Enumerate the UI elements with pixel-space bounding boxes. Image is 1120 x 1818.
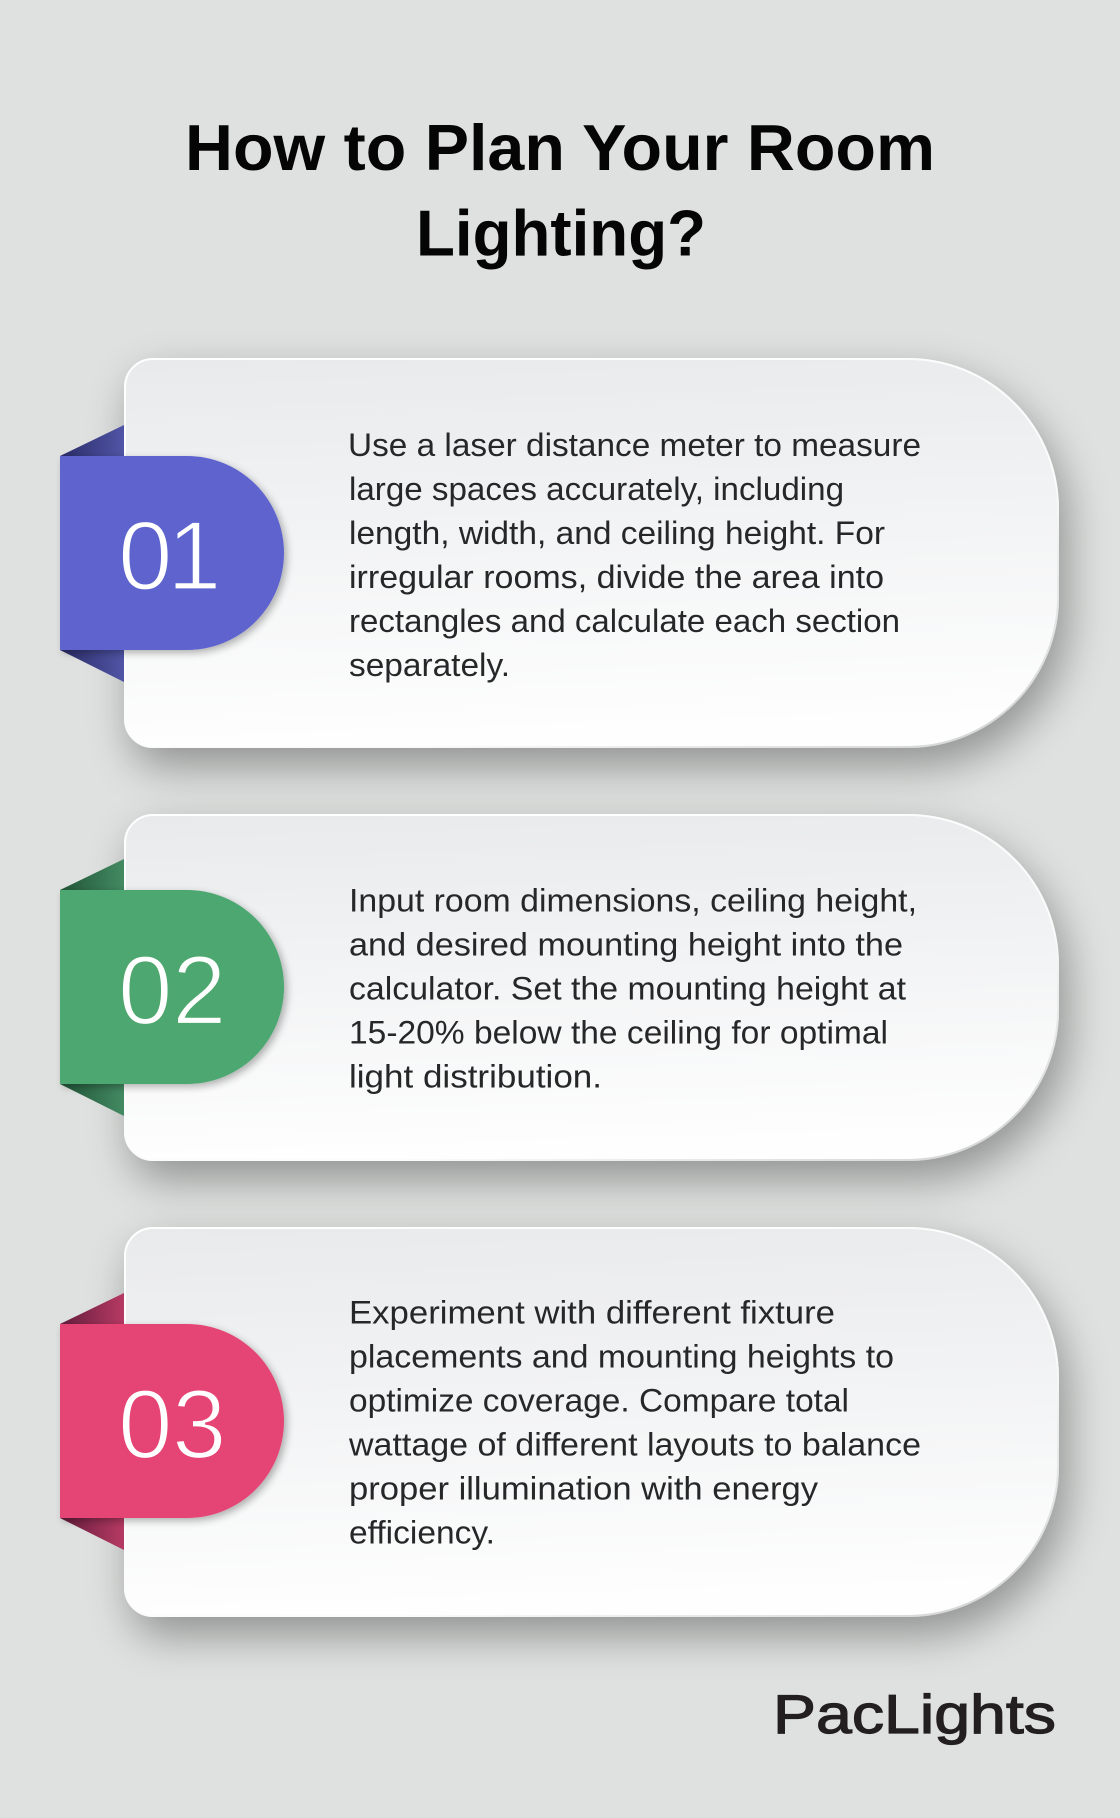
text: step 1 bbox=[348, 427, 921, 683]
text: step 2 bbox=[349, 882, 917, 1094]
number: 03: 03 bbox=[118, 1369, 227, 1479]
fold: step 2 top bbox=[60, 859, 124, 890]
title bbox=[185, 111, 935, 270]
panel: step 1 bbox=[60, 359, 1058, 747]
text: step 1: Use a laser distance meter to measure bbox=[348, 427, 921, 463]
text: step 1: rectangles and calculate each section bbox=[349, 603, 900, 639]
text: step 3: optimize coverage. Compare total bbox=[349, 1382, 849, 1418]
badge: step 1 bbox=[60, 456, 284, 650]
text: step 2: Input room dimensions, ceiling height, bbox=[349, 882, 917, 918]
panel: step 2 bbox=[60, 815, 1058, 1160]
number: 02: 02 bbox=[118, 935, 227, 1045]
fold: step 3 bottom bbox=[60, 1518, 124, 1550]
number: 01: 01 bbox=[118, 500, 222, 610]
text: step 3: wattage of different layouts to balance bbox=[348, 1426, 921, 1462]
fold: step 3 top bbox=[60, 1293, 124, 1324]
text: step 1: separately. bbox=[349, 647, 510, 683]
title: How to Plan Your Room bbox=[185, 111, 935, 184]
text: step 3: proper illumination with energy bbox=[349, 1470, 819, 1506]
fold: step 1 top bbox=[60, 425, 124, 456]
text: step 3: placements and mounting heights to bbox=[349, 1338, 894, 1374]
text: step 3: Experiment with different fixture bbox=[349, 1294, 835, 1330]
logo: PacLights: PacLights bbox=[773, 1683, 1056, 1745]
badge: step 3 bbox=[60, 1324, 284, 1518]
text: step 2: and desired mounting height into the bbox=[349, 926, 903, 962]
card: step 3 bbox=[125, 1228, 1058, 1616]
badge: step 2 bbox=[60, 890, 284, 1084]
text: step 2: light distribution. bbox=[349, 1058, 602, 1094]
panel: step 3 bbox=[60, 1228, 1058, 1616]
text: step 3 bbox=[348, 1294, 921, 1550]
text: step 1: length, width, and ceiling height. For bbox=[349, 515, 885, 551]
text: step 3: efficiency. bbox=[349, 1514, 495, 1550]
fold: step 2 bottom bbox=[60, 1084, 124, 1116]
title: Lighting? bbox=[416, 196, 706, 270]
card: step 2 bbox=[125, 815, 1058, 1160]
fold: step 1 bottom bbox=[60, 650, 124, 682]
card: step 1 bbox=[125, 359, 1058, 747]
text: step 2: 15-20% below the ceiling for optimal bbox=[349, 1014, 888, 1050]
text: step 1: irregular rooms, divide the area into bbox=[349, 559, 884, 595]
text: step 2: calculator. Set the mounting height at bbox=[349, 970, 906, 1006]
text: step 1: large spaces accurately, including bbox=[349, 471, 844, 507]
